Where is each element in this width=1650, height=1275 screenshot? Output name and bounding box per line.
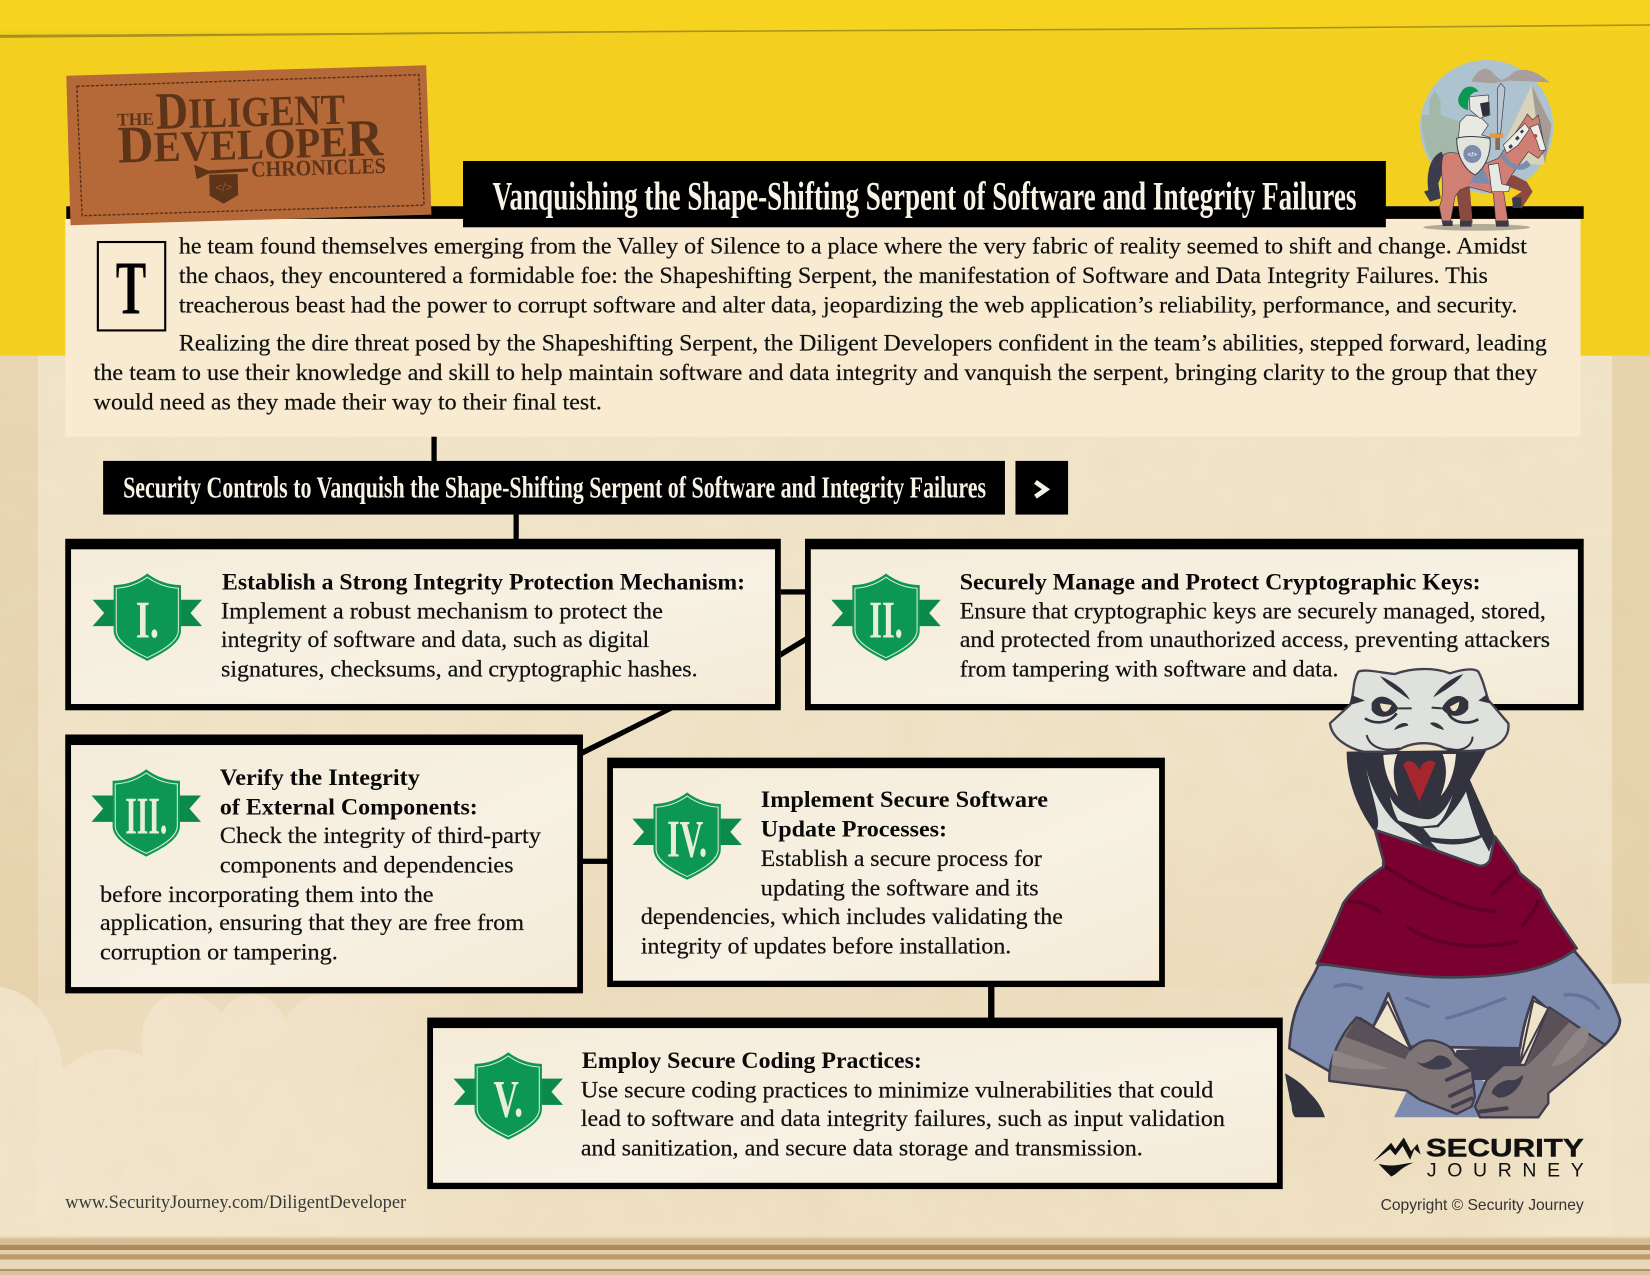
- panel: control I: Establish a Strong Integrity Protection Mechanism:: [222, 569, 745, 595]
- panel: control III: Verify the Integrity: [220, 765, 420, 791]
- panel: control V: and sanitization, and secure data storage and transmission.: [581, 1135, 1143, 1161]
- header rule: [66, 206, 1584, 219]
- panel: control II: Ensure that cryptographic keys are securely managed, stored,: [960, 599, 1546, 625]
- text: introduction: would need as they made their way to their final test.: [94, 389, 602, 415]
- panel: control II: [805, 539, 1584, 710]
- icon: shield II: II.: [869, 592, 903, 650]
- panel: control III: Check the integrity of third-party: [220, 823, 541, 849]
- icon: arrow button: [1015, 461, 1068, 515]
- heading: security controls: Security Controls to Vanquish the Shape-Shifting Serpent of Software and Integrity Failures: [123, 471, 986, 505]
- illustration: knight on horse: [1420, 60, 1553, 231]
- panel: control IV: Update Processes:: [761, 817, 947, 843]
- text: introduction: Realizing the dire threat posed by the Shapeshifting Serpent, the Diligent Developers confident in the team’s abilities, stepped forward, leading: [179, 330, 1547, 356]
- panel: control V: Use secure coding practices to minimize vulnerabilities that could: [581, 1078, 1213, 1104]
- panel: control III: of External Components:: [220, 794, 478, 820]
- connector: intro to controls heading: [431, 437, 437, 462]
- panel: control V: [427, 1018, 1283, 1189]
- icon: shield IV: IV.: [667, 811, 707, 869]
- panel: control III: application, ensuring that they are free from: [100, 910, 525, 936]
- background: wood edge: [0, 1236, 1650, 1275]
- panel: control IV: integrity of updates before installation.: [641, 933, 1011, 959]
- icon: shield V: V.: [494, 1070, 523, 1128]
- panel: control III: corruption or tampering.: [100, 940, 338, 966]
- text: introduction: treacherous beast had the power to corrupt software and alter data, jeopardizing the web application’s reliability, performance, and security.: [179, 293, 1517, 319]
- text: website: www.SecurityJourney.com/DiligentDeveloper: [65, 1192, 407, 1213]
- panel: control IV: Establish a secure process for: [761, 846, 1042, 872]
- panel: control III: [65, 735, 583, 993]
- panel: control II: and protected from unauthorized access, preventing attackers: [960, 627, 1550, 653]
- logo: leather patch: THE: [117, 109, 154, 130]
- title banner: [463, 161, 1386, 227]
- panel: control II: from tampering with software and data.: [960, 657, 1339, 683]
- logo: leather patch: [66, 65, 431, 225]
- text: introduction: the team to use their knowledge and skill to help maintain software and data integrity and vanquish the serpent, bringing clarity to the group that they: [94, 360, 1538, 386]
- icon: shield IV: [632, 792, 742, 880]
- icon: shield II: [831, 573, 941, 661]
- icon: shield I: [93, 573, 202, 661]
- logo: Security Journey: SECURITY: [1426, 1134, 1584, 1162]
- icon: shield I: I.: [136, 592, 159, 650]
- text: introduction: he team found themselves emerging from the Valley of Silence to a place where the very fabric of reality seemed to shift and change. Amidst: [179, 234, 1527, 260]
- illustration: knight on horse: </>: [1468, 151, 1477, 158]
- panel: control IV: updating the software and its: [761, 876, 1039, 902]
- heading: security controls: [103, 461, 1005, 515]
- panel: control V: lead to software and data integrity failures, such as input validation: [581, 1106, 1225, 1132]
- background: yellow cover: [0, 0, 1650, 356]
- icon: shield V: [454, 1052, 563, 1140]
- drop cap: [98, 242, 165, 331]
- logo: leather patch: DILIGENT: [155, 78, 346, 141]
- text: introduction: [94, 234, 1547, 415]
- panel: control III: before incorporating them into the: [100, 882, 434, 908]
- drop cap: T: [116, 247, 146, 331]
- panel: control II: Securely Manage and Protect Cryptographic Keys:: [960, 569, 1481, 595]
- panel: control I: [65, 539, 781, 710]
- logo: Security Journey: JOURNEY: [1427, 1159, 1584, 1181]
- illustration: serpent: [1285, 669, 1620, 1117]
- panel: control I: signatures, checksums, and cryptographic hashes.: [221, 657, 698, 683]
- logo: leather patch: CHRONICLES: [251, 153, 386, 182]
- panel: control IV: [607, 758, 1165, 987]
- icon: shield III: [92, 769, 201, 857]
- panel: control IV: dependencies, which includes validating the: [641, 904, 1063, 930]
- logo: Security Journey: [1373, 1134, 1584, 1181]
- panel: introduction: [65, 219, 1581, 437]
- text: copyright: Copyright © Security Journey: [1381, 1197, 1584, 1214]
- panel: control I: Implement a robust mechanism to protect the: [221, 599, 663, 625]
- panel: control V: Employ Secure Coding Practices:: [582, 1048, 922, 1074]
- logo: leather patch: DEVELOPER: [117, 109, 385, 175]
- panel: control IV: Implement Secure Software: [761, 787, 1048, 813]
- panel: control III: components and dependencies: [220, 852, 514, 878]
- connectors between boxes: [514, 515, 994, 1019]
- panel: control I: integrity of software and data, such as digital: [221, 627, 650, 653]
- text: introduction: the chaos, they encountered a formidable foe: the Shapeshifting Serpent, the manifestation of Software and Data Integrity Failures. This: [179, 263, 1488, 289]
- logo: leather patch: </>: [215, 182, 233, 194]
- icon: shield III: III.: [125, 787, 167, 845]
